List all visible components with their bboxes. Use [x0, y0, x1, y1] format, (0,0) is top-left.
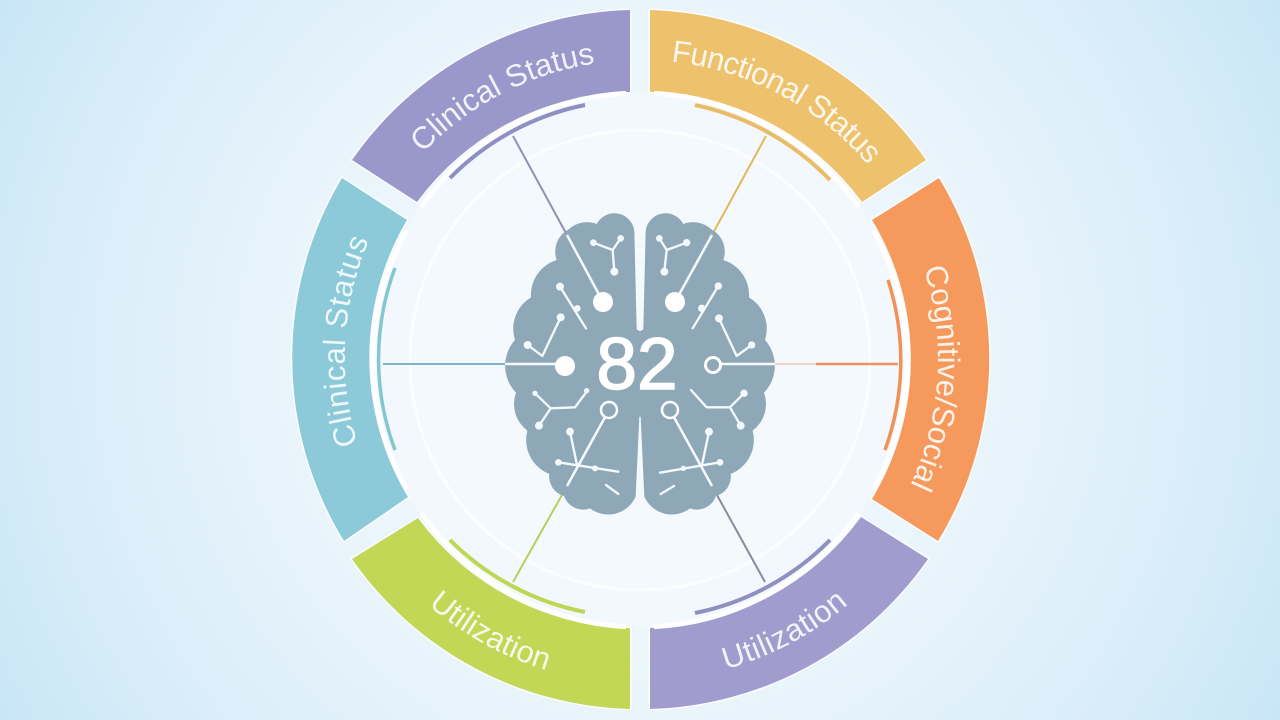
panel: clinical status top-left: [350, 8, 632, 232]
icon: circuit brain: [505, 213, 775, 515]
circuit traces: [528, 238, 752, 494]
panel: utilization bottom-right: [648, 495, 930, 710]
faint inner ring: [410, 130, 870, 590]
left hemisphere: [505, 213, 641, 515]
panel: functional status top-right: Functional Status: [674, 40, 878, 162]
panel: clinical status top-left: Clinical Status: [412, 48, 594, 148]
panel: clinical status left: [291, 176, 505, 543]
panel: utilization bottom-left: Utilization: [432, 590, 548, 670]
panel: utilization bottom-left: [350, 494, 632, 710]
panel: functional status top-right: [648, 8, 928, 232]
panel: cognitive/social right: Cognitive/Social: [911, 266, 960, 493]
centre score: 82: [596, 324, 678, 405]
inner disc: [372, 92, 908, 628]
brain nodes: [555, 292, 720, 418]
right hemisphere: [639, 213, 775, 515]
circuit dots: [524, 235, 755, 471]
panel: clinical status left: Clinical Status: [322, 236, 367, 446]
connector lines inside brain: [505, 235, 775, 486]
panel: cognitive/social right: [775, 176, 990, 543]
panel: utilization bottom-right: Utilization: [722, 594, 847, 667]
